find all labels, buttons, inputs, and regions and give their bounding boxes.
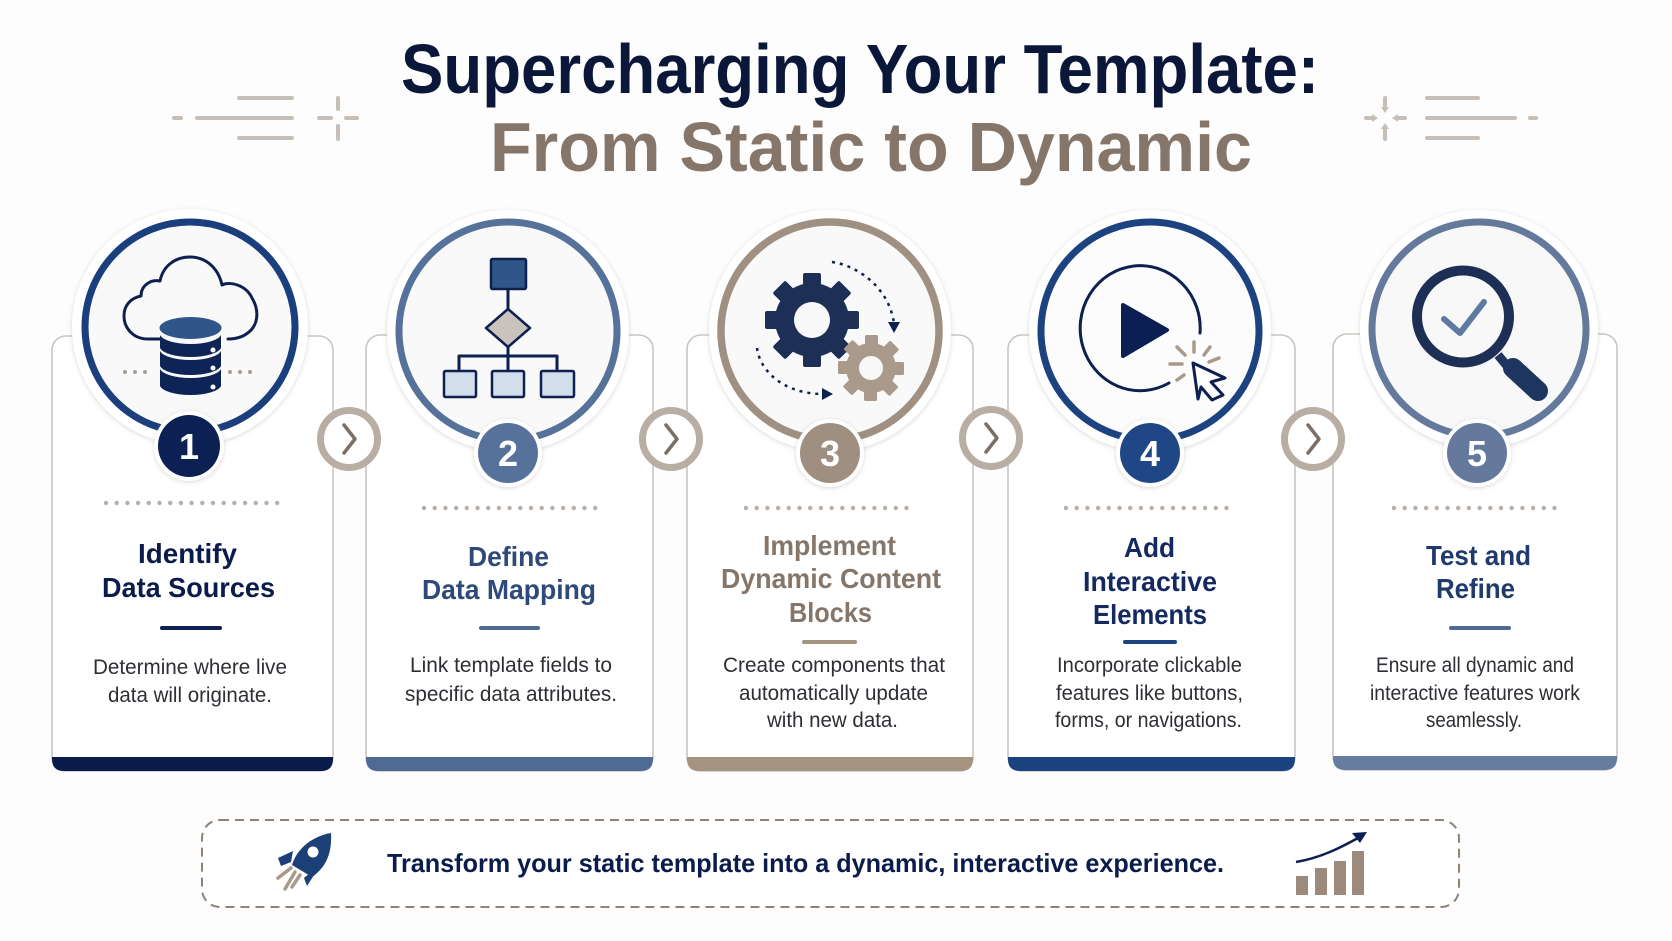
panel: step 4 add interactive elements [1008,210,1295,771]
circle 4 [1029,210,1271,452]
heading 3: Implement [763,530,896,561]
panel: step 3 implement dynamic content blocks [687,210,973,771]
text 2: Link template fields to [410,654,612,677]
title [401,30,1319,186]
heading 5 [1426,540,1531,604]
arrow: step 4 to 5 [1284,410,1342,468]
circle 2 [387,210,629,452]
heading 1: Data Sources [102,572,275,603]
text 1 [93,656,287,707]
heading 3: Dynamic Content [721,563,941,594]
icon: growth chart [1296,832,1367,895]
badge 4 [1116,419,1184,487]
text 2: specific data attributes. [405,683,617,706]
arrow: step 2 to 3 [642,410,700,468]
text 5 [1370,654,1580,732]
badge 3 [796,419,864,487]
card 1 bottom bar [52,757,333,771]
heading 3: Blocks [789,597,872,628]
badge 5: 5 [1467,433,1487,474]
badge 2 [474,419,542,487]
badge 2: 2 [498,433,518,474]
heading 2: Define [468,541,549,572]
badge 4: 4 [1140,433,1160,474]
text 5: Ensure all dynamic and [1376,654,1574,677]
heading 4 [1083,532,1217,630]
text 2 [405,654,617,706]
badge 3: 3 [820,433,840,474]
heading 1 [102,538,275,603]
card 4 bottom bar [1008,757,1295,771]
circle 3 [709,210,951,452]
icon: gears with dotted arrows [757,262,904,401]
text 3: automatically update [739,682,928,705]
decoration: left speed lines and sparkle [174,98,357,139]
icon: magnifying glass with check [1417,270,1538,391]
card 3 bottom bar [687,757,973,771]
heading 2 [422,541,596,605]
heading 5: Refine [1436,573,1515,604]
heading 2: Data Mapping [422,574,596,605]
text 1: Determine where live [93,656,287,679]
decoration: right sparkle and speed lines [1366,98,1536,139]
text 4: Incorporate clickable [1057,654,1242,677]
badge 1 [154,411,224,481]
arrow: step 3 to 4 [962,410,1020,466]
icon: flowchart mapping [444,259,574,397]
heading 4: Add [1124,532,1175,563]
text 3: with new data. [766,709,898,732]
circle 1 [72,209,308,445]
title: Supercharging Your Template: [401,30,1319,108]
heading 1: Identify [138,538,237,569]
callout: transform banner [202,820,1459,907]
icon: play button with cursor [1080,266,1225,400]
panel: step 5 test and refine [1333,210,1617,770]
text 3 [723,654,945,732]
icon: cloud database [124,257,257,395]
arrow: step 1 to 2 [320,410,378,468]
text 4 [1055,654,1243,732]
text 5: seamlessly. [1426,709,1522,732]
text 4: forms, or navigations. [1055,709,1242,732]
text 1: data will originate. [108,684,272,707]
icon: rocket [278,833,331,889]
text 3: Create components that [723,654,945,677]
heading 4: Interactive [1083,566,1217,597]
text 5: interactive features work [1370,682,1580,705]
badge 1: 1 [179,426,199,467]
panel: step 2 define data mapping [366,210,653,771]
badge 5 [1443,419,1511,487]
panel: step 1 identify data sources [52,209,333,771]
banner text: Transform your static template into a dynamic, interactive experience. [387,848,1224,878]
card 2 bottom bar [366,757,653,771]
circle 5 [1360,210,1598,448]
text 4: features like buttons, [1056,682,1243,705]
heading 3 [721,530,941,628]
card 5 bottom bar [1333,756,1617,770]
heading 5: Test and [1426,540,1531,571]
heading 4: Elements [1093,599,1207,630]
title: From Static to Dynamic [490,108,1252,186]
